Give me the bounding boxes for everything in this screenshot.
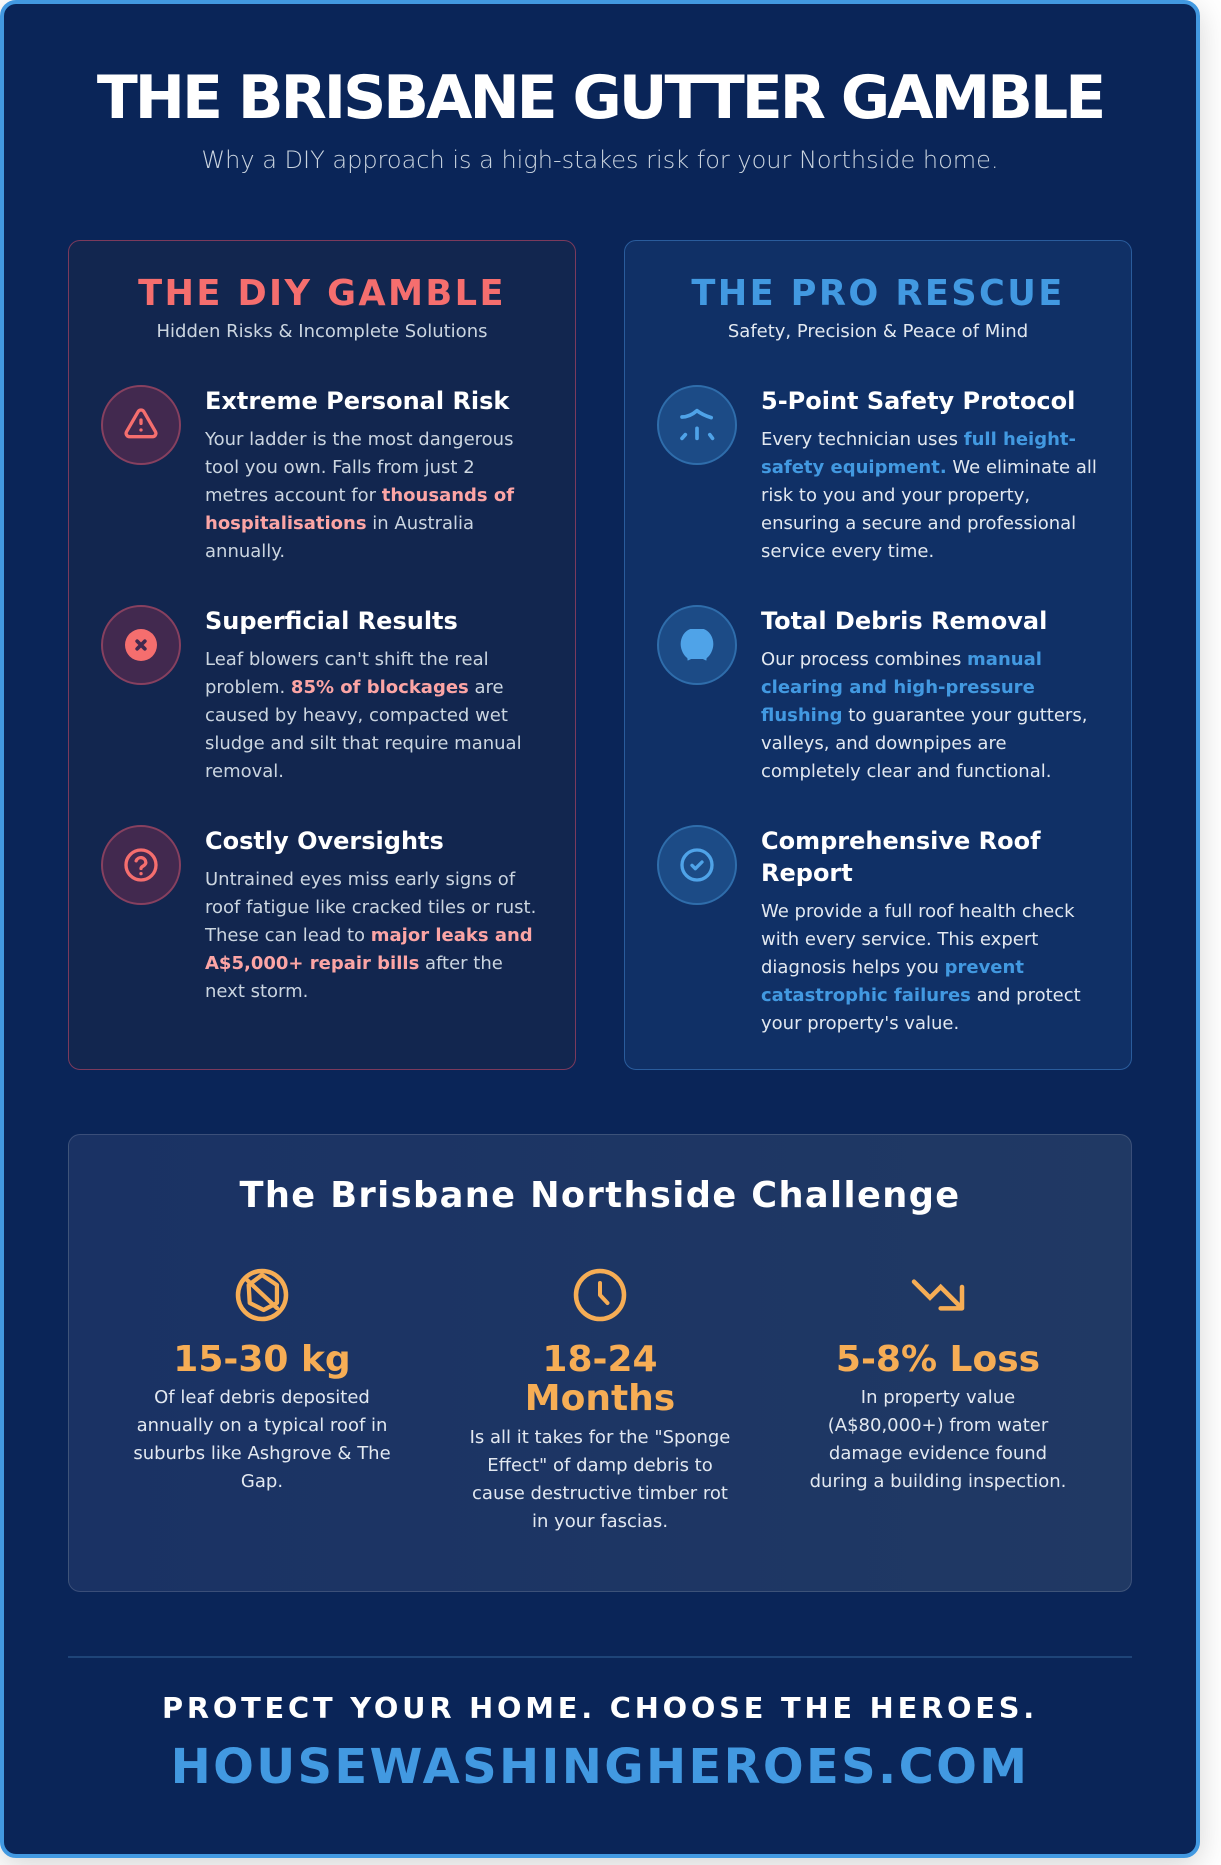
icon: blocked gutter <box>236 1268 288 1322</box>
text: costly oversights: These can lead to major leaks and <box>205 925 533 946</box>
text: superficial results: Leaf blowers can't shift the real <box>205 649 489 670</box>
text: costly oversights: roof fatigue like cracked tiles or rust. <box>205 897 536 918</box>
text: superficial results <box>205 607 522 782</box>
text: debris removal: valleys, and downpipes are <box>761 733 1007 754</box>
text: roof report: catastrophic failures and protect <box>761 985 1081 1006</box>
text: safety protocol: service every time. <box>761 541 934 562</box>
stat value: 18-24 months: 18-24 <box>542 1338 658 1380</box>
text: superficial results: problem. 85% of blockages are <box>205 677 504 698</box>
item: debris removal <box>657 605 1087 782</box>
text: debris removal: clearing and high-pressure <box>761 677 1035 698</box>
panel: Brisbane Northside challenge <box>68 1134 1132 1592</box>
panel: the pro rescue <box>624 240 1132 1070</box>
item: costly oversights <box>101 825 536 1002</box>
text: safety protocol: risk to you and your property, <box>761 485 1030 506</box>
stat text: sponge effect <box>470 1427 730 1532</box>
icon: trending down <box>912 1279 964 1311</box>
challenge heading: The Brisbane Northside Challenge <box>239 1175 961 1216</box>
subtitle: Why a DIY approach is a high-stakes risk for your Northside home. <box>201 146 999 174</box>
text: safety protocol: safety equipment. We eliminate all <box>761 457 1097 478</box>
icon: x circle <box>101 605 181 685</box>
text: roof report: Report <box>761 859 853 887</box>
text: costly oversights: A$5,000+ repair bills after the <box>205 953 503 974</box>
text: roof report: your property's value. <box>761 1013 959 1034</box>
text: superficial results: caused by heavy, compacted wet <box>205 705 508 726</box>
stat text: property value: (A$80,000+) from water <box>828 1415 1048 1436</box>
text: superficial results: removal. <box>205 761 284 782</box>
text: costly oversights: Untrained eyes miss early signs of <box>205 869 515 890</box>
stat text: leaf debris: Gap. <box>241 1471 283 1492</box>
footer tagline: PROTECT YOUR HOME. CHOOSE THE HEROES. <box>162 1690 1038 1724</box>
stat text: leaf debris: suburbs like Ashgrove & The <box>133 1443 391 1464</box>
icon: clock <box>574 1268 626 1322</box>
stat value: 18-24 months <box>525 1338 675 1419</box>
text: safety protocol: 5-Point Safety Protocol <box>761 387 1075 415</box>
text: extreme personal risk: tool you own. Falls from just 2 <box>205 457 475 478</box>
text: roof report <box>761 827 1081 1034</box>
panel heading: DIY: THE DIY GAMBLE <box>138 273 506 314</box>
stat value: 5-8% loss: 5-8% Loss <box>836 1338 1040 1380</box>
stat text: property value: during a building inspection. <box>810 1471 1066 1492</box>
stat: property value loss <box>810 1279 1066 1492</box>
icon: check circle <box>657 825 737 905</box>
text: debris removal: Our process combines manual <box>761 649 1042 670</box>
item: superficial results <box>101 605 522 782</box>
text: debris removal <box>761 607 1087 782</box>
panel: the DIY gamble <box>68 240 576 1070</box>
stat value: 15-30 kg: 15-30 kg <box>173 1338 351 1380</box>
text: debris removal: flushing to guarantee your gutters, <box>761 705 1087 726</box>
text: safety protocol: Every technician uses full height- <box>761 429 1076 450</box>
text: safety protocol: ensuring a secure and professional <box>761 513 1076 534</box>
stat text: sponge effect: cause destructive timber rot <box>472 1483 728 1504</box>
icon: warning triangle <box>101 385 181 465</box>
text: superficial results: Superficial Results <box>205 607 458 635</box>
stat text: leaf debris: annually on a typical roof in <box>137 1415 387 1436</box>
text: roof report: Comprehensive Roof <box>761 827 1041 855</box>
text: extreme personal risk: annually. <box>205 541 285 562</box>
item: extreme personal risk <box>101 385 514 562</box>
stat text: property value: In property value <box>861 1387 1015 1408</box>
text: extreme personal risk <box>205 387 514 562</box>
stat text: property value <box>810 1387 1066 1492</box>
panel subheading: pro: Safety, Precision & Peace of Mind <box>728 321 1028 342</box>
text: superficial results: sludge and silt that require manual <box>205 733 522 754</box>
icon: question circle <box>101 825 181 905</box>
text: safety protocol <box>761 387 1097 562</box>
text: debris removal: completely clear and functional. <box>761 761 1051 782</box>
panel subheading: DIY: Hidden Risks & Incomplete Solutions <box>156 321 487 342</box>
item: safety protocol <box>657 385 1097 562</box>
item: roof report <box>657 825 1081 1034</box>
stat text: sponge effect: Effect" of damp debris to <box>487 1455 713 1476</box>
text: extreme personal risk: metres account for thousands of <box>205 485 514 506</box>
stat text: sponge effect: Is all it takes for the "Sponge <box>470 1427 730 1448</box>
stat: leaf debris <box>133 1268 391 1492</box>
footer website: HOUSEWASHINGHEROES.COM <box>171 1739 1029 1795</box>
text: extreme personal risk: Extreme Personal Risk <box>205 387 509 415</box>
stat text: sponge effect: in your fascias. <box>532 1511 668 1532</box>
stat: 18-24 months <box>470 1268 730 1532</box>
title: THE BRISBANE GUTTER GAMBLE <box>97 63 1103 133</box>
stat value: 18-24 months: Months <box>525 1378 675 1419</box>
panel heading: pro: THE PRO RESCUE <box>691 273 1065 314</box>
icon: debris blob <box>657 605 737 685</box>
text: roof report: diagnosis helps you prevent <box>761 957 1024 978</box>
text: roof report: We provide a full roof health check <box>761 901 1075 922</box>
text: debris removal: Total Debris Removal <box>761 607 1047 635</box>
text: roof report: with every service. This expert <box>761 929 1038 950</box>
text: costly oversights <box>204 827 536 1002</box>
text: extreme personal risk: Your ladder is the most dangerous <box>205 429 513 450</box>
text: costly oversights: next storm. <box>205 981 308 1002</box>
stat text: leaf debris: Of leaf debris deposited <box>154 1387 370 1408</box>
stat text: property value: damage evidence found <box>829 1443 1047 1464</box>
icon: safety roof and ticks <box>657 385 737 465</box>
stat text: leaf debris <box>133 1387 391 1492</box>
text: extreme personal risk: hospitalisations in Australia <box>205 513 474 534</box>
text: costly oversights: Costly Oversights <box>205 827 444 855</box>
